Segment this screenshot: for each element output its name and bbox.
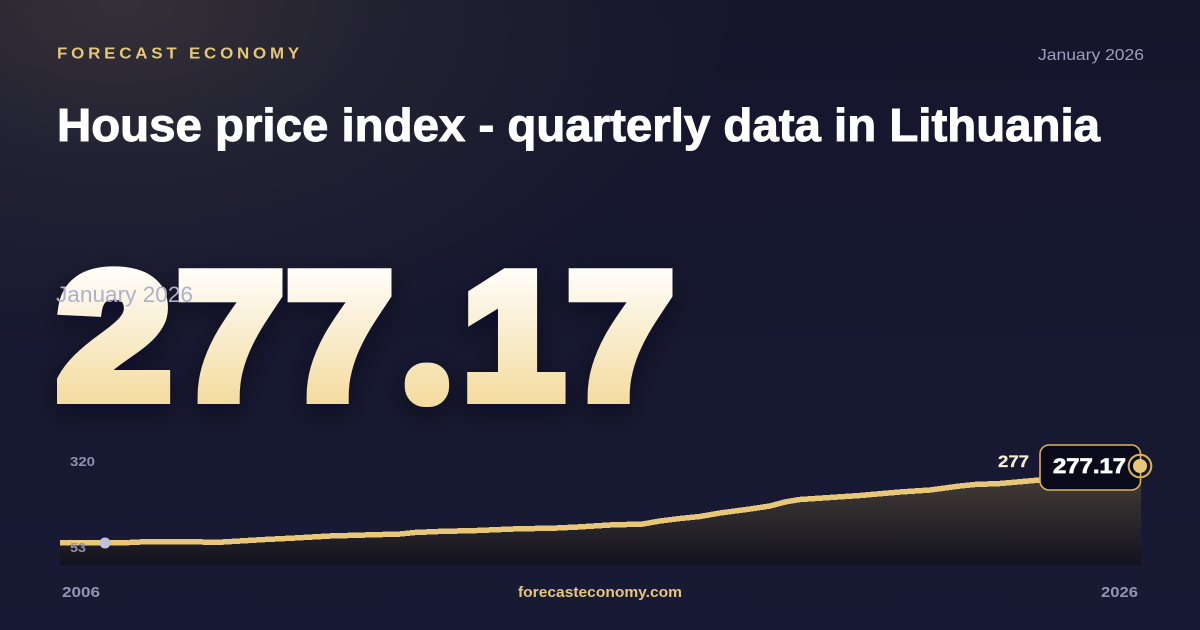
start point marker (100, 538, 110, 548)
last value label: 277 (998, 452, 1029, 471)
big value: 7 (568, 237, 673, 435)
title: House price index - quarterly data in Lithuania (57, 99, 1100, 151)
big value (58, 237, 673, 435)
end point marker (1129, 455, 1151, 477)
big value: . (423, 361, 431, 394)
date top right: January 2026 (1038, 47, 1144, 64)
axis min label: 53 (70, 540, 86, 555)
axis max label: 320 (70, 454, 95, 469)
date overlapping value: January 2026 (56, 282, 193, 307)
chart area fill (60, 472, 1141, 565)
brand label: FORECAST ECONOMY (57, 46, 303, 62)
start year: 2006 (62, 584, 100, 601)
big value: 7 (178, 237, 283, 435)
big value: 7 (287, 237, 392, 435)
website: forecasteconomy.com (518, 584, 682, 601)
value badge (1040, 445, 1140, 490)
value badge: 277.17 (1053, 455, 1126, 478)
end year: 2026 (1101, 584, 1138, 601)
big value: 2 (58, 238, 170, 435)
big value: 1 (463, 237, 563, 435)
chart line (60, 480, 1040, 543)
line chart (60, 445, 1151, 565)
